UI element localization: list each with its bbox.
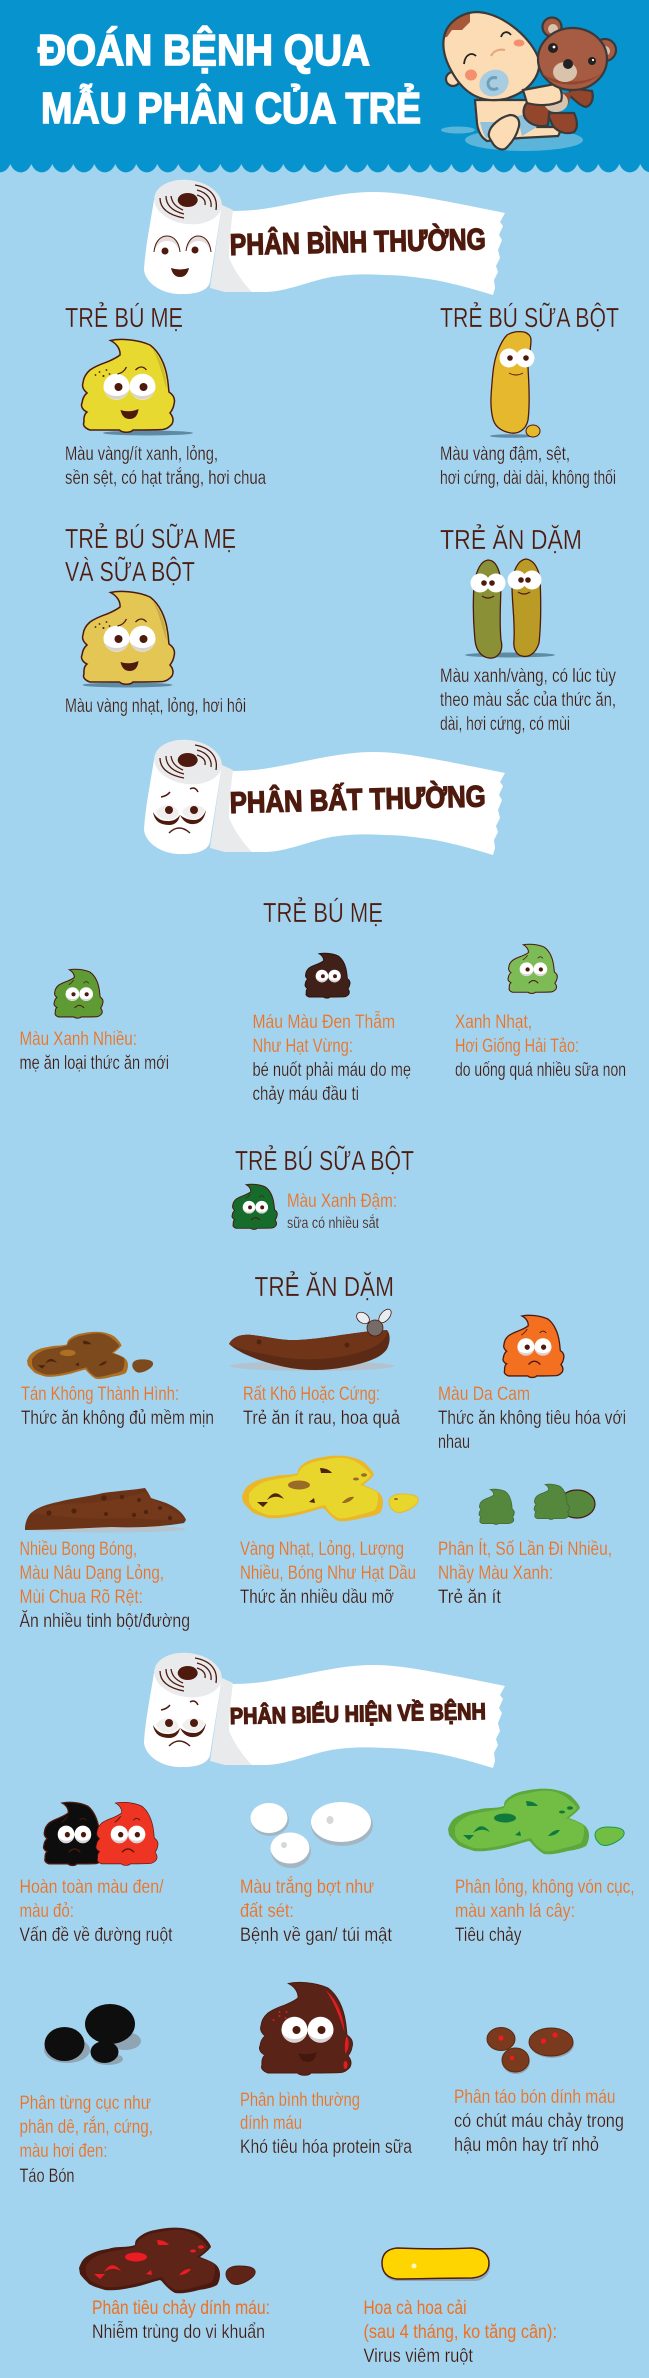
icon: brown loose stool with blood xyxy=(79,2228,255,2293)
text: nhiều bong bóng: Ăn nhiều tinh bột/đường xyxy=(20,1611,190,1632)
icon: green watery stool xyxy=(448,1789,624,1854)
text: nhiều bong bóng: Mùi Chua Rõ Rệt: xyxy=(20,1587,143,1608)
text: phân ít: Trẻ ăn ít xyxy=(438,1587,502,1608)
text: màu xanh nhiều: Màu Xanh Nhiều: xyxy=(20,1029,137,1050)
icon: two green and yellow stools xyxy=(465,559,555,658)
text: thin dark yellow stool: Màu vàng đậm, sệt, xyxy=(440,444,570,465)
icon: foamy brown stool xyxy=(24,1488,186,1532)
icon: green stool xyxy=(54,969,103,1018)
title: MẪU PHÂN CỦA TRẺ xyxy=(41,82,421,133)
text: phân bình thường dính máu: Khó tiêu hóa protein sữa xyxy=(240,2137,412,2158)
heading: trẻ bú mẹ (bất thường): TRẺ BÚ MẸ xyxy=(263,896,383,928)
text: rất khô hoặc cứng: Trẻ ăn ít rau, hoa quả xyxy=(243,1408,400,1429)
icon: light green stool xyxy=(508,944,557,993)
text: màu xanh nhiều xyxy=(20,1029,169,1074)
text: màu xanh đậm xyxy=(287,1191,397,1232)
text: màu trắng bợt: đất sét: xyxy=(240,1901,294,1922)
text: pale yellow stool: Màu vàng nhạt, lỏng, hơi hôi xyxy=(65,696,246,717)
text: xanh nhạt xyxy=(455,1012,626,1081)
heading: trẻ bú sữa mẹ và sữa bột: VÀ SỮA BỘT xyxy=(65,556,195,587)
icon: thin dark yellow stool xyxy=(490,332,540,438)
text: phân lỏng: Tiêu chảy xyxy=(455,1925,522,1946)
heading: trẻ bú sữa mẹ và sữa bột: TRẺ BÚ SỮA MẸ xyxy=(65,522,236,554)
text: màu da cam xyxy=(438,1384,626,1453)
icon: pale yellow oily stool xyxy=(242,1456,418,1521)
text: phân bình thường dính máu: dính máu xyxy=(240,2113,302,2134)
header band xyxy=(0,0,649,173)
heading: trẻ bú sữa bột (bất thường): TRẺ BÚ SỮA BỘT xyxy=(235,1144,414,1176)
text: phân táo bón dính máu: có chút máu chảy trong xyxy=(454,2111,624,2132)
text: yellow stool xyxy=(65,444,266,489)
icon: hard log stool with fly xyxy=(229,1307,394,1371)
text: yellow stool: sền sệt, có hạt trắng, hơi chua xyxy=(65,467,266,489)
icon: yellow stool xyxy=(82,339,193,436)
text: nhiều bong bóng xyxy=(20,1539,190,1632)
text: phân tiêu chảy dính máu: Nhiễm trùng do vi khuẩn xyxy=(92,2321,265,2343)
text: yellow stool: Màu vàng/ít xanh, lỏng, xyxy=(65,444,218,465)
text: phân bình thường dính máu: Phân bình thường xyxy=(240,2090,360,2111)
text: phân táo bón dính máu: Phân táo bón dính máu xyxy=(454,2087,616,2108)
icon: dark brown stool xyxy=(305,953,350,998)
text: hoàn toàn màu đen: Vấn đề về đường ruột xyxy=(20,1925,173,1946)
text: tán không thành hình: Thức ăn không đủ mềm mịn xyxy=(21,1408,214,1429)
text: phân từng cục xyxy=(20,2093,153,2187)
banner: phân bất thường: PHÂN BẤT THƯỜNG xyxy=(229,779,486,820)
text: hoàn toàn màu đen: Hoàn toàn màu đen/ xyxy=(20,1877,164,1898)
text: green and yellow stools xyxy=(440,666,616,735)
text: phân ít: Phân Ít, Số Lần Đi Nhiều, xyxy=(438,1539,612,1560)
text: màu trắng bợt: Màu trắng bợt như xyxy=(240,1876,374,1898)
text: màu da cam: nhau xyxy=(438,1432,470,1453)
banner: phân bất thường xyxy=(144,735,505,855)
text: nhiều bong bóng: Nhiều Bong Bóng, xyxy=(20,1539,137,1560)
banner: phân bình thường xyxy=(144,175,505,295)
text: phân lỏng: màu xanh lá cây: xyxy=(455,1901,575,1922)
banner: phân biểu hiện về bệnh xyxy=(144,1648,505,1768)
text: phân từng cục: Táo Bón xyxy=(20,2166,74,2187)
text: màu xanh đậm: Màu Xanh Đậm: xyxy=(287,1191,397,1212)
text: thin dark yellow stool xyxy=(440,444,616,489)
text: màu da cam: Màu Da Cam xyxy=(438,1384,530,1405)
text: màu xanh đậm: sữa có nhiều sắt xyxy=(287,1213,379,1232)
text: máu màu đen thẫm: Máu Màu Đen Thẫm xyxy=(252,1011,395,1033)
icon: baby with teddy bear xyxy=(440,8,616,151)
title xyxy=(38,25,421,133)
text: phân ít xyxy=(438,1539,612,1608)
icon: pale yellow stool xyxy=(82,591,174,688)
text: máu màu đen thẫm: bé nuốt phải máu do mẹ xyxy=(252,1060,411,1081)
text: phân từng cục: màu hơi đen: xyxy=(20,2141,108,2162)
icon: orange stool xyxy=(503,1315,564,1377)
text: vàng nhạt lỏng: Vàng Nhạt, Lỏng, Lượng xyxy=(240,1539,404,1560)
title: ĐOÁN BỆNH QUA xyxy=(38,25,370,75)
text: phân ít: Nhầy Màu Xanh: xyxy=(438,1563,553,1584)
text: tán không thành hình xyxy=(21,1384,214,1429)
text: xanh nhạt: Xanh Nhạt, xyxy=(455,1012,532,1033)
text: rất khô hoặc cứng: Rất Khô Hoặc Cứng: xyxy=(243,1384,380,1405)
icon: black pellets xyxy=(44,2004,141,2065)
icon: small green stools xyxy=(479,1484,595,1524)
text: màu xanh nhiều: mẹ ăn loại thức ăn mới xyxy=(20,1053,169,1074)
text: màu trắng bợt xyxy=(240,1876,393,1946)
heading: trẻ bú sữa mẹ và sữa bột xyxy=(65,522,236,587)
text: green and yellow stools: dài, hơi cứng, có mùi xyxy=(440,714,570,735)
text: hoàn toàn màu đen: màu đỏ: xyxy=(20,1901,74,1922)
text: phân lỏng xyxy=(455,1877,634,1946)
text: hoa cà hoa cải: Virus viêm ruột xyxy=(364,2346,474,2367)
text: phân tiêu chảy dính máu: Phân tiêu chảy dính máu: xyxy=(92,2298,270,2319)
text: hoa cà hoa cải xyxy=(364,2298,557,2367)
icon: white clay stools xyxy=(250,1802,373,1868)
text: máu màu đen thẫm: chảy máu đầu ti xyxy=(252,1084,359,1105)
banner: phân biểu hiện về bệnh: PHÂN BIỂU HIỆN VỀ BỆNH xyxy=(230,1697,486,1729)
text: vàng nhạt lỏng xyxy=(240,1539,416,1608)
text: máu màu đen thẫm xyxy=(252,1011,411,1105)
icon: dark green stool xyxy=(232,1184,277,1229)
text: phân táo bón dính máu xyxy=(454,2087,624,2156)
icon: yellow capsule stool xyxy=(382,2248,490,2281)
text: nhiều bong bóng: Màu Nâu Dạng Lỏng, xyxy=(20,1563,164,1584)
icon: loose brown stool xyxy=(27,1332,153,1379)
text: phân từng cục: phân dê, rắn, cứng, xyxy=(20,2116,153,2138)
text: máu màu đen thẫm: Như Hạt Vừng: xyxy=(252,1036,353,1057)
text: vàng nhạt lỏng: Nhiều, Bóng Như Hạt Dầu xyxy=(240,1563,416,1584)
banner: phân bình thường: PHÂN BÌNH THƯỜNG xyxy=(229,222,486,262)
text: phân từng cục: Phân từng cục như xyxy=(20,2093,151,2114)
icon: black and red stools xyxy=(44,1802,158,1865)
text: tán không thành hình: Tán Không Thành Hình: xyxy=(21,1384,179,1405)
icon: brown pellets with blood xyxy=(487,2028,574,2074)
text: phân táo bón dính máu: hậu môn hay trĩ nhỏ xyxy=(454,2135,599,2156)
icon: brown stool with blood xyxy=(260,1982,352,2075)
text: phân bình thường dính máu xyxy=(240,2090,412,2158)
heading: trẻ ăn dặm (bất thường): TRẺ ĂN DẶM xyxy=(254,1270,394,1302)
text: phân tiêu chảy dính máu xyxy=(92,2298,270,2343)
text: xanh nhạt: Hơi Giống Hải Tảo: xyxy=(455,1036,579,1057)
text: màu trắng bợt: Bệnh về gan/ túi mật xyxy=(240,1925,393,1946)
heading: trẻ bú mẹ: TRẺ BÚ MẸ xyxy=(65,301,183,333)
text: hoàn toàn màu đen xyxy=(20,1877,173,1946)
text: hoa cà hoa cải: (sau 4 tháng, ko tăng cân): xyxy=(364,2322,557,2343)
text: vàng nhạt lỏng: Thức ăn nhiều dầu mỡ xyxy=(240,1587,394,1608)
heading: trẻ ăn dặm: TRẺ ĂN DẶM xyxy=(440,523,582,555)
text: hoa cà hoa cải: Hoa cà hoa cải xyxy=(364,2298,466,2319)
text: rất khô hoặc cứng xyxy=(243,1384,400,1429)
